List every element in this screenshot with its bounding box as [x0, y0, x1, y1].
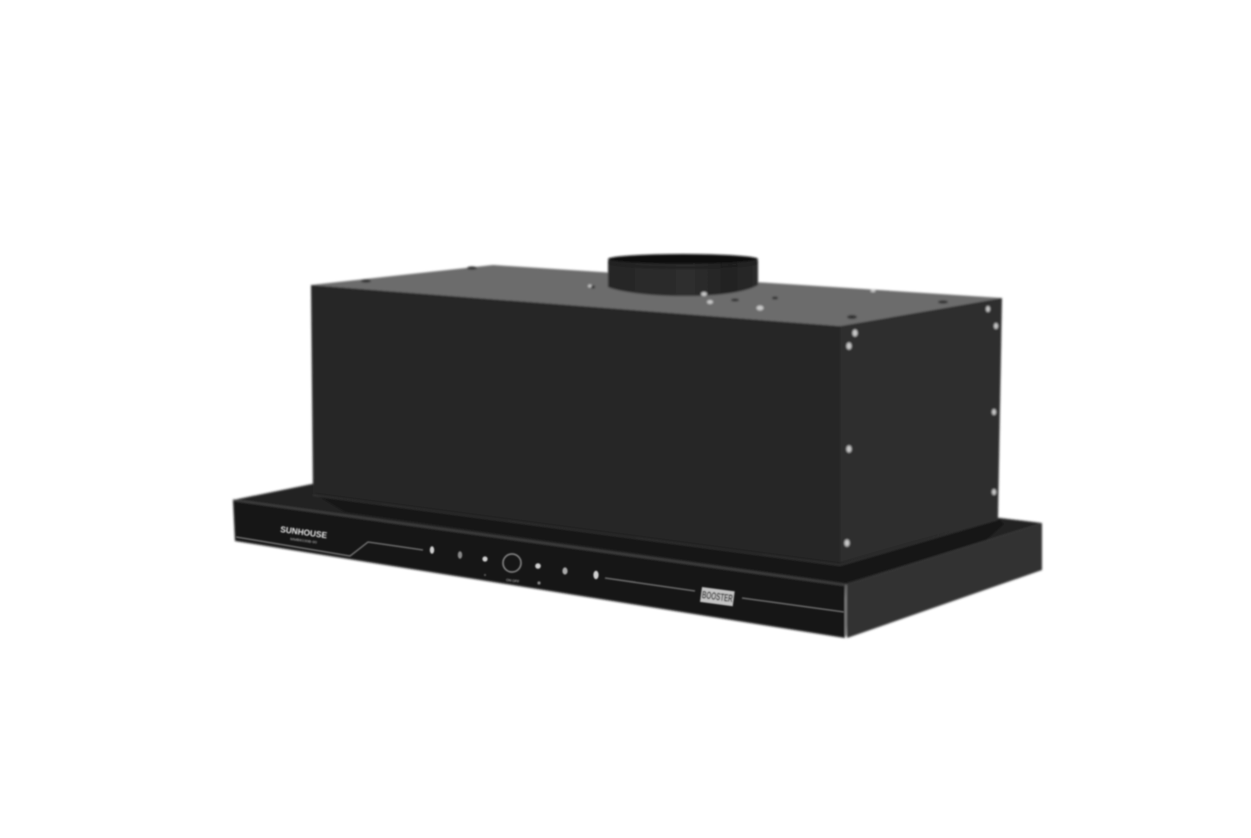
touch icons — [430, 546, 599, 585]
brand logo: SUNHOUSE — [280, 524, 328, 540]
base top surface — [233, 484, 1042, 585]
box front face — [311, 285, 840, 563]
shadow band under box — [313, 493, 1004, 583]
hood box — [311, 265, 1002, 565]
screws — [588, 284, 998, 546]
base side face — [845, 523, 1042, 638]
box side face — [840, 298, 1002, 563]
control panel details — [236, 524, 844, 612]
trim line left — [236, 537, 423, 556]
base front face — [233, 500, 845, 638]
model text: MMB8100B-90 — [290, 537, 317, 545]
dial label: ON OFF — [506, 578, 520, 584]
trim line middle — [605, 578, 695, 591]
base panel — [233, 484, 1042, 638]
box top face — [311, 265, 1002, 326]
duct collar — [608, 254, 758, 296]
trim line right — [742, 598, 844, 612]
booster badge — [700, 587, 735, 606]
booster badge: BOOSTER — [701, 589, 734, 605]
top face holes — [361, 266, 948, 319]
touch dial — [503, 554, 521, 572]
